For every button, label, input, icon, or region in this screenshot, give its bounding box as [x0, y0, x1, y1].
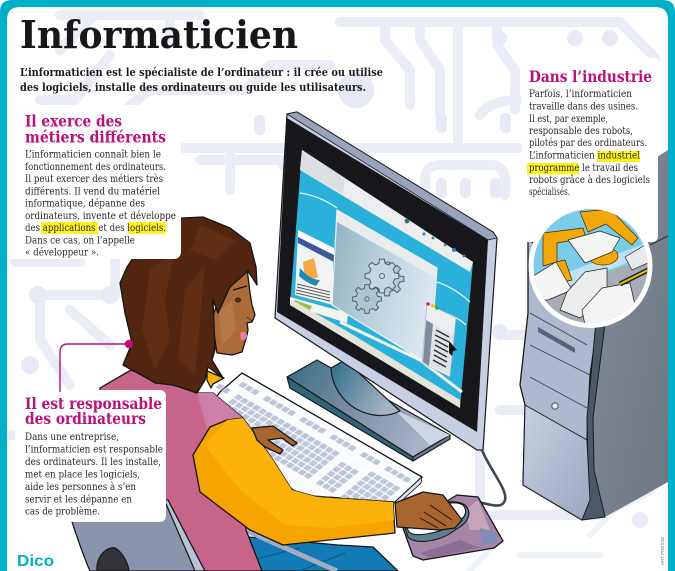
mouse — [405, 502, 469, 541]
body text: différents. Il vend du matériel — [25, 186, 161, 198]
hair — [120, 217, 257, 393]
body text: robots grâce à des logiciels — [529, 174, 650, 186]
body: pink sweater — [100, 370, 262, 571]
jeans — [248, 537, 398, 571]
body text: ordinateurs, invente et développe — [25, 210, 176, 222]
monitor cable — [460, 450, 505, 506]
woman — [100, 217, 462, 571]
arm: yellow sleeve — [193, 418, 395, 545]
gears on screen — [353, 259, 404, 313]
heading: Il est responsable — [25, 394, 162, 413]
body text: L’informaticien connaît bien le — [25, 148, 161, 160]
monitor — [275, 112, 497, 450]
heading: des ordinateurs — [25, 409, 146, 428]
monitor stand — [287, 360, 450, 461]
body text: travaille dans des usines. — [529, 100, 638, 112]
body text: pilotés par des ordinateurs. — [529, 137, 647, 149]
mouse pad — [403, 495, 503, 560]
chair — [72, 490, 215, 571]
body text: responsable des robots, — [529, 125, 633, 137]
panel: métiers différents — [0, 105, 181, 259]
body text: programme le travail des — [529, 162, 638, 174]
body text: spécialisés. — [529, 186, 570, 198]
body text: des ordinateurs. Il les installe, — [25, 456, 161, 468]
face — [212, 268, 255, 355]
label: Dico: Dico — [17, 553, 54, 570]
callout line and dot — [60, 340, 133, 392]
heading: Dans l’industrie — [529, 67, 652, 86]
body text: cas de problème. — [25, 505, 100, 517]
text block: Il est responsable des ordinateurs — [25, 394, 163, 517]
body text: l’informaticien est responsable — [25, 444, 163, 456]
body text — [25, 431, 163, 517]
body text: met en place les logiciels, — [25, 469, 140, 481]
illustration: factory robots inset — [528, 204, 655, 330]
title: Informaticien — [20, 12, 298, 57]
body text: aide les personnes à s’en — [25, 481, 136, 493]
body text: Dans ce cas, on l’appelle — [25, 234, 135, 246]
credit: ART PRESSE — [660, 537, 665, 565]
cursor — [449, 341, 457, 356]
body text: des applications et des logiciels. — [25, 222, 166, 234]
hand on keyboard — [252, 426, 297, 454]
hand on mouse — [395, 492, 462, 530]
body text: servir et les dépanne en — [25, 493, 132, 505]
heading — [25, 394, 162, 428]
collar — [207, 371, 224, 388]
intro text: des logiciels, installe des ordinateurs ou guide les utilisateurs. — [20, 81, 366, 94]
text block: Dans l'industrie — [527, 67, 652, 198]
intro text: L’informaticien est le spécialiste de l’ordinateur : il crée ou utilise — [20, 66, 383, 79]
body text: informatique, dépanne des — [25, 198, 145, 210]
screen — [290, 150, 473, 408]
highlights — [41, 222, 166, 234]
highlights — [527, 151, 640, 174]
keyboard — [187, 373, 422, 515]
body text: Il peut exercer des métiers très — [25, 173, 163, 185]
body text: Il est, par exemple, — [529, 113, 608, 125]
popup list — [422, 302, 456, 377]
heading — [25, 112, 166, 146]
body text — [25, 148, 176, 258]
panel: responsable — [15, 390, 166, 522]
computer tower — [520, 150, 668, 520]
body text — [529, 88, 650, 198]
body text: Dans une entreprise, — [25, 431, 119, 443]
panel: industrie — [522, 58, 658, 242]
body text: L’informaticien industriel — [529, 150, 641, 162]
body text: Parfois, l’informaticien — [529, 88, 632, 100]
intro text — [20, 66, 383, 94]
heading: métiers différents — [25, 128, 166, 146]
heading: Il exerce des — [25, 112, 122, 130]
body text: « développeur ». — [25, 246, 99, 258]
body text: fonctionnement des ordinateurs. — [25, 161, 166, 173]
text block: Il exerce des métiers différents — [25, 112, 176, 258]
